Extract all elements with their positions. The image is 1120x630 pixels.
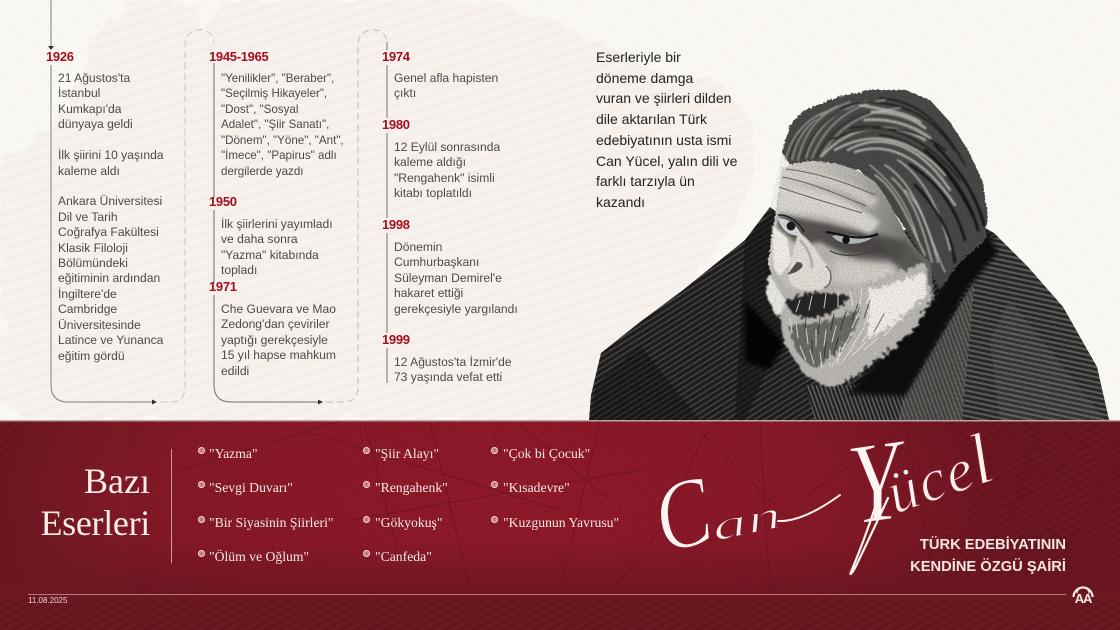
text 1945-1965: "Yenilikler", "Beraber", "Seçilmiş Hikayeler", "Dost", "Sosyal Adalet", "Şiir Sanatı", "Dönem", "Yöne", "Ant", "İmece", "Papirus" adlı dergilerde yazdı [221,72,344,178]
beard strands [790,272,922,368]
timeline column 2 [209,49,344,378]
bullet [198,481,205,488]
portrait illustration [589,89,1109,420]
text 1950: İlk şiirlerini yayımladı ve daha sonra "Yazma" kitabında topladı [221,217,333,277]
item: "Bir Siyasinin Şiirleri" [209,515,333,530]
face [768,161,935,305]
footer rule [28,594,1066,595]
hair [782,90,988,290]
bullet [363,550,370,557]
item: "Kısadevre" [503,480,570,495]
item: "Şiir Alayı" [375,446,439,461]
year 1926: 1926 [46,49,74,64]
timeline connector lines and arrows [48,0,388,404]
bullet [363,447,370,454]
year 1999: 1999 [382,332,410,347]
date: 11.08.2025 [28,596,67,605]
intro text: Eserleriyle bir döneme damga vuran ve şiirleri dilden dile aktarılan Türk edebiyatının usta ismi Can Yücel, yalın dili ve farklı tarzıyla ün kazandı [596,49,737,210]
year 1980: 1980 [382,117,410,132]
eyes [778,215,878,255]
signature: Can Yücel: C [643,454,723,574]
item: "Sevgi Duvarı" [209,480,293,495]
subtitle: TÜRK EDEBİYATININ KENDİNE ÖZGÜ ŞAİRİ [910,537,1066,574]
signature: Can Yücel: an [708,492,785,550]
nose [787,232,831,291]
year 1974: 1974 [382,49,410,64]
bullet [198,550,205,557]
bullet [198,516,205,523]
item: "Çok bi Çocuk" [503,446,590,461]
text 1971: Che Guevara ve Mao Zedong'dan çeviriler yaptığı gerekçesiyle 15 yıl hapse mahkum edildi [221,302,336,378]
works list [198,446,619,564]
icon: AA logo [1072,586,1094,606]
bullet [491,481,498,488]
coat [585,200,1120,420]
bullet [363,481,370,488]
icon: AA logo: AA [1075,591,1093,606]
year 1945-1965: 1945-1965 [209,49,268,64]
timeline column 1 [46,49,164,363]
text 1974: Genel afla hapisten çıktı [394,71,498,100]
year 1971: 1971 [209,279,237,294]
divider [171,449,172,563]
text 1999: 12 Ağustos'ta İzmir'de 73 yaşında vefat etti [394,355,512,384]
section heading: Bazı Eserleri: Eserleri [40,503,150,543]
bullet [363,516,370,523]
signature: Can Yücel: Y [841,413,918,549]
item: "Rengahenk" [375,480,448,495]
item: "Kuzgunun Yavrusu" [503,515,619,530]
section heading: Bazı Eserleri [40,461,150,543]
year 1998: 1998 [382,217,410,232]
bullet [491,447,498,454]
text 1980: 12 Eylül sonrasında kaleme aldığı "Rengahenk" isimli kitabı toplatıldı [394,140,500,200]
text 1926: 21 Ağustos'ta İstanbul Kumkapı'da dünyaya geldi İlk şiirini 10 yaşında kaleme aldı Ankara Üniversitesi Dil ve Tarih Coğrafya Fakültesi Klasik Filoloji Bölümündeki eğitiminin ardından İngiltere'de Cambridge Üniversitesinde Latince ve Yunanca eğitim gördü [58,71,164,363]
item: "Gökyokuş" [375,515,442,530]
timeline column 3 [382,49,518,384]
item: "Ölüm ve Oğlum" [209,549,309,564]
item: "Canfeda" [375,549,432,564]
item: "Yazma" [209,446,258,461]
section heading: Bazı Eserleri: Bazı [84,461,150,501]
bullet [491,516,498,523]
year 1950: 1950 [209,194,237,209]
forehead wrinkles [779,169,875,213]
texture overlay [585,85,1115,420]
beard [766,262,932,388]
bullet [198,447,205,454]
signature: Can Yücel: ücel [874,418,1003,529]
text 1998: Dönemin Cumhurbaşkanı Süleyman Demirel'e hakaret ettiği gerekçesiyle yargılandı [394,240,518,316]
